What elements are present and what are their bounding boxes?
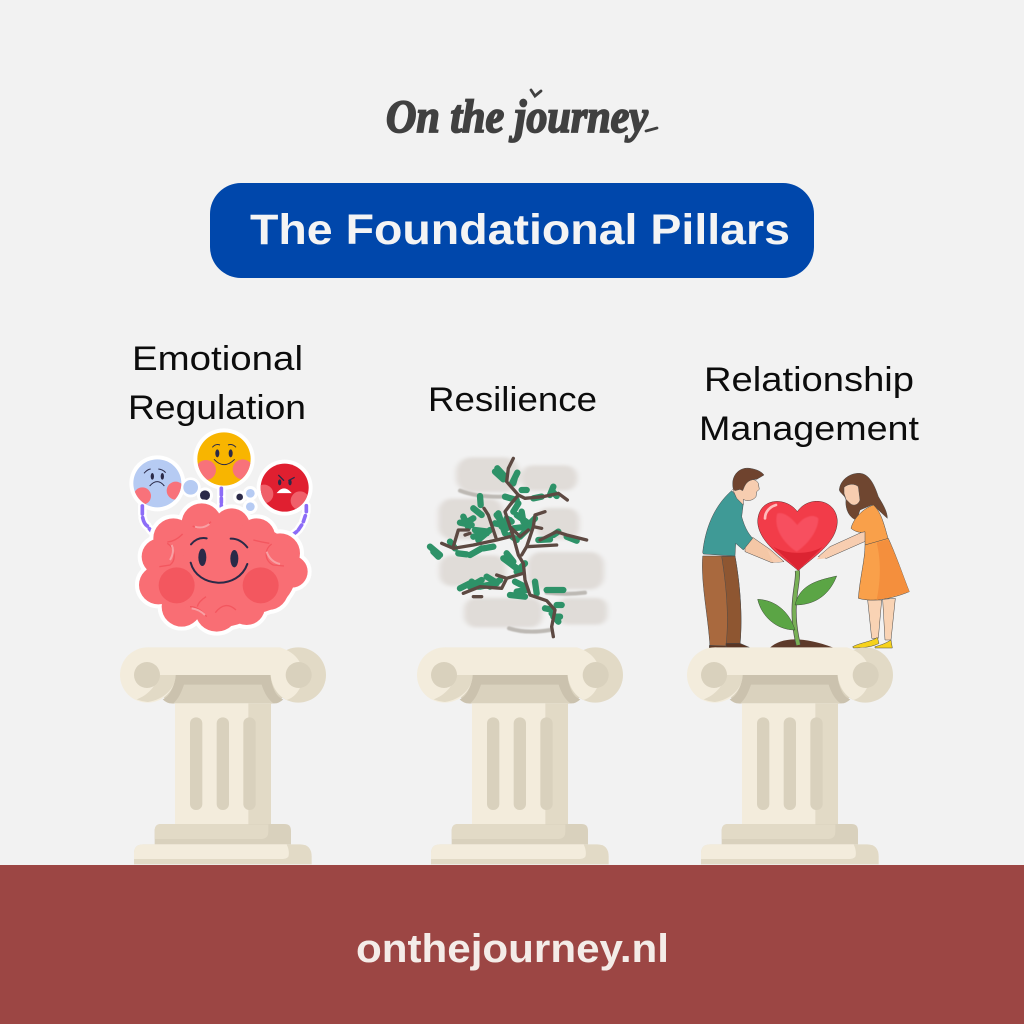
footer band: onthejourney.nl xyxy=(356,927,669,971)
icon: couple holding heart plant xyxy=(702,468,909,648)
pillar: resilience xyxy=(417,647,623,864)
pillar: relationship management xyxy=(687,647,893,864)
heading: Emotional Regulation: Regulation xyxy=(128,389,306,427)
title banner: The Foundational Pillars xyxy=(250,206,790,254)
title banner xyxy=(210,183,814,278)
heading: Relationship Management xyxy=(699,361,920,448)
footer band xyxy=(0,865,1024,1024)
logo: On the journey: On the journey xyxy=(386,91,648,143)
heading: Relationship Management: Relationship xyxy=(704,361,914,399)
heart flower xyxy=(758,501,837,648)
pillar: emotional regulation xyxy=(120,647,326,864)
heading: Resilience: Resilience xyxy=(428,381,597,419)
icon: plant growing through stone wall xyxy=(430,457,607,637)
icon: smiling brain with emotion faces xyxy=(129,428,313,632)
man xyxy=(702,468,784,648)
heading: Relationship Management: Management xyxy=(699,410,920,448)
woman xyxy=(818,473,909,648)
heading: Emotional Regulation xyxy=(128,340,306,427)
heading: Emotional Regulation: Emotional xyxy=(132,340,303,378)
